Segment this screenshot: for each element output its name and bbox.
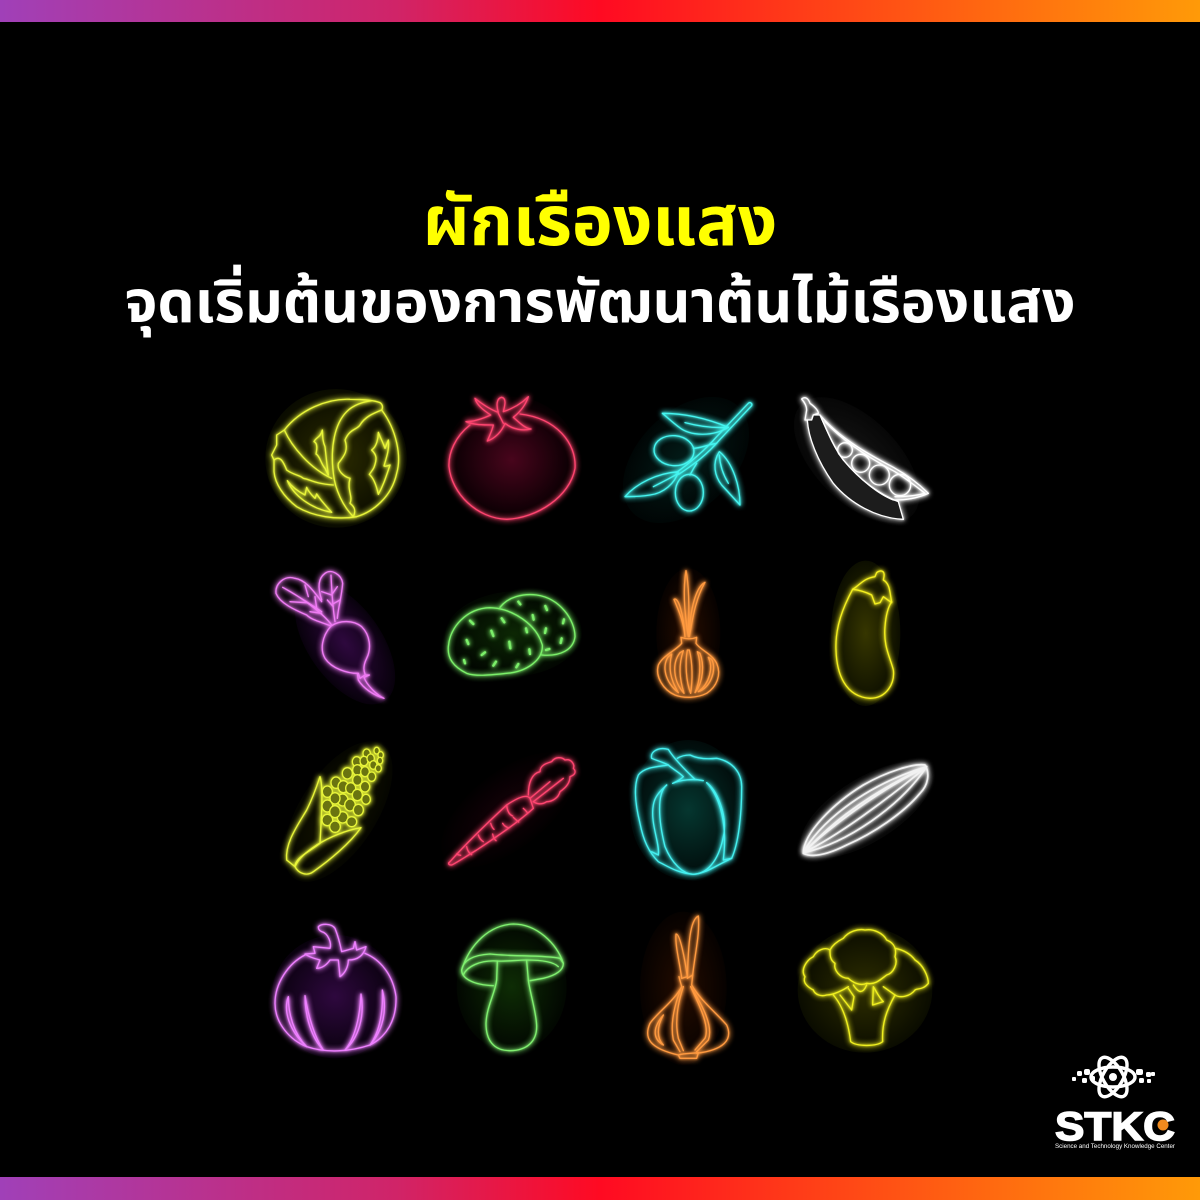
icon: potatoes <box>443 588 584 680</box>
icon: purple tomato <box>272 924 398 1058</box>
logo atom mark <box>1072 1053 1155 1101</box>
logo orange dot <box>1158 1120 1168 1130</box>
logo wordmark: STKC <box>1055 1105 1175 1149</box>
icon: corn <box>263 724 414 900</box>
icon: carrot <box>422 731 595 889</box>
icon: cucumber <box>786 743 947 877</box>
quadrant: bottom-right vegetables <box>630 740 947 1065</box>
icon: mushroom <box>457 922 567 1052</box>
quadrant: top-left vegetables <box>265 389 584 722</box>
quadrant: top-right vegetables <box>599 373 942 706</box>
icon: cabbage <box>265 389 407 528</box>
icon: olive branch <box>599 373 773 547</box>
top gradient bar <box>0 0 1200 22</box>
subtitle: จุดเริ่มต้นของการพัฒนาต้นไม้เรืองแสง <box>125 270 1075 335</box>
icon: tomato <box>445 397 578 523</box>
logo tagline: Science and Technology Knowledge Center <box>1055 1143 1176 1150</box>
logo: STKC <box>1055 1053 1176 1150</box>
quadrant: bottom-left vegetables <box>263 724 595 1058</box>
icon: bell pepper <box>630 740 747 880</box>
icon: pea pod <box>772 375 942 545</box>
icon: eggplant <box>831 561 900 706</box>
title: ผักเรืองแสง <box>423 183 777 260</box>
icon: garlic <box>640 912 729 1065</box>
icon: radish <box>275 565 415 722</box>
icon: broccoli <box>798 927 932 1053</box>
bottom gradient bar <box>0 1177 1200 1200</box>
icon: onion <box>656 568 720 698</box>
